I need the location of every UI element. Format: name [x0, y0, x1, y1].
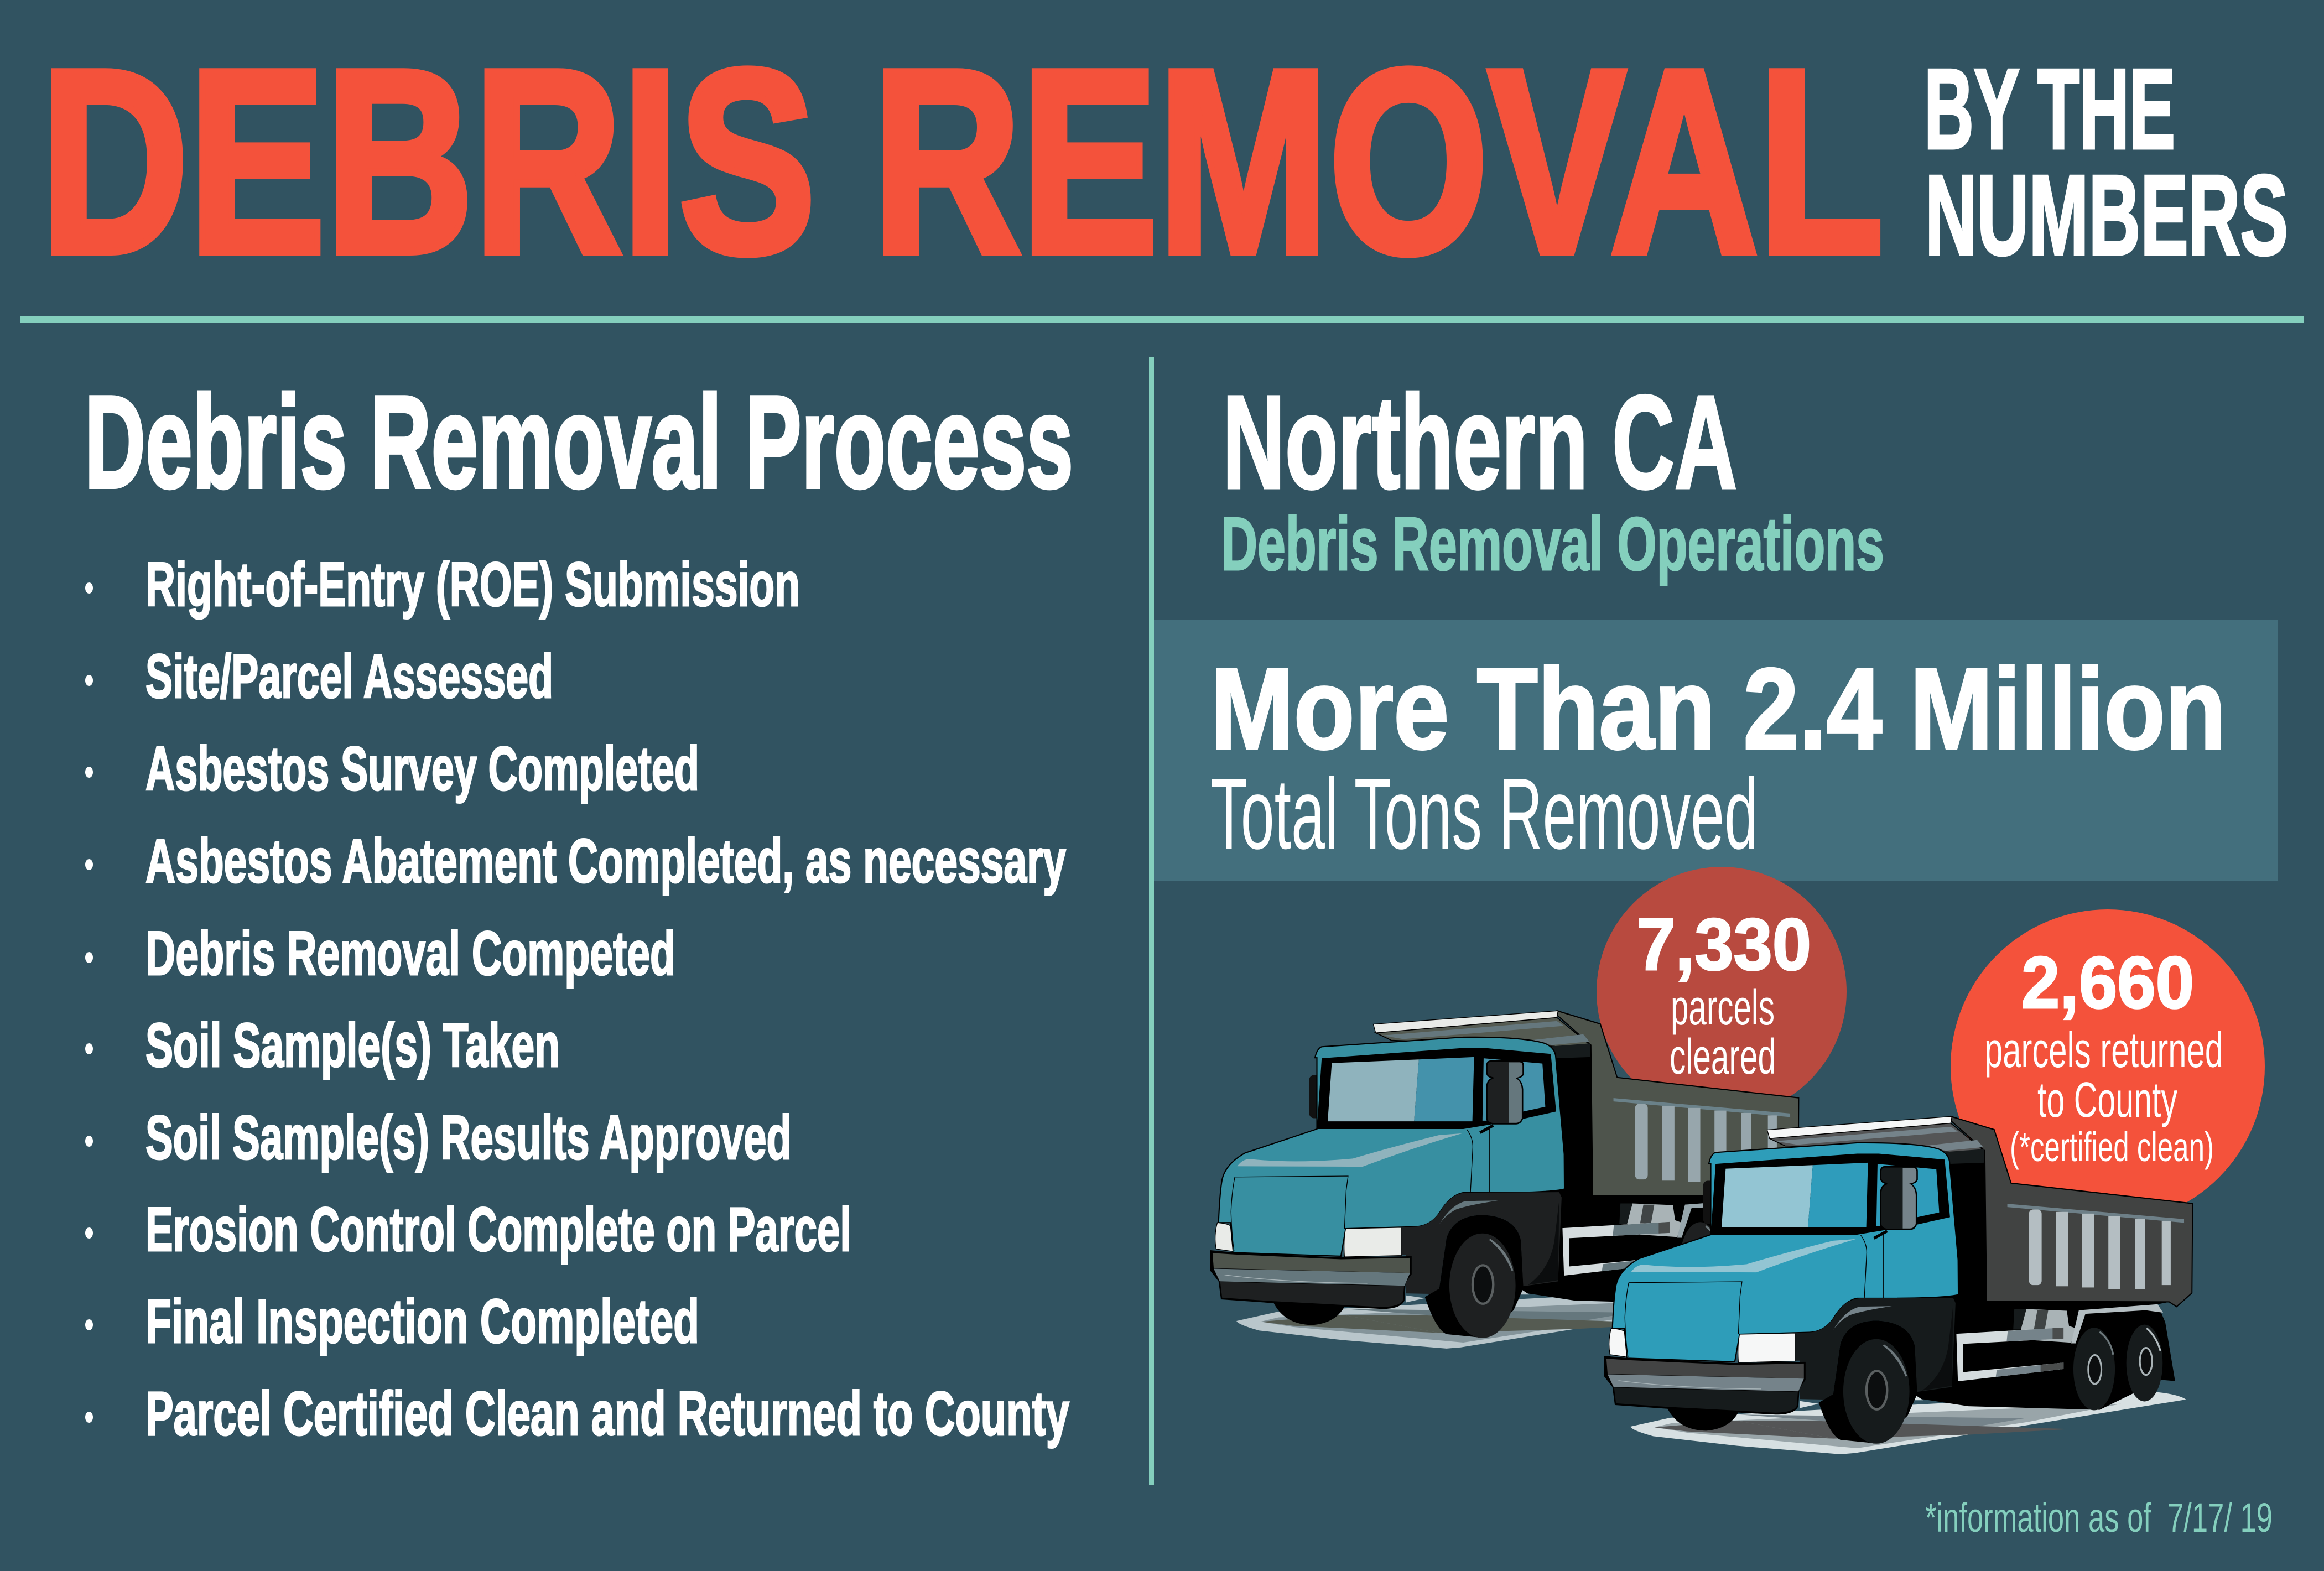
process step list: Final Inspection Completed: [145, 1287, 699, 1356]
process step list: Parcel Certified Clean and Returned to County: [145, 1379, 1069, 1448]
panel: total tons band: [1154, 620, 2278, 881]
process step list: Soil Sample(s) Taken: [145, 1011, 560, 1080]
process step list: Asbestos Survey Completed: [145, 734, 699, 803]
icon: dump truck, back: [1210, 1011, 1798, 1349]
callout: parcels cleared: cleared: [1670, 1029, 1776, 1085]
panel: debris removal process: [85, 369, 1073, 1448]
process step list: Erosion Control Complete on Parcel: [145, 1195, 851, 1264]
process step list: Debris Removal Competed: [145, 919, 675, 988]
callout: parcels cleared: parcels: [1671, 980, 1775, 1036]
process step list: Right-of-Entry (ROE) Submission: [145, 550, 800, 619]
process step list: Soil Sample(s) Results Approved: [145, 1103, 792, 1172]
callout: parcels returned: to County: [2037, 1073, 2177, 1128]
title: DEBRIS REMOVAL: [40, 16, 1884, 308]
callout: parcels returned: [1951, 909, 2265, 1224]
callout: parcels returned: (*certified clean): [2010, 1124, 2214, 1170]
subheading: operations: Debris Removal Operations: [1221, 502, 1884, 586]
heading: northern ca: Northern CA: [1223, 368, 1737, 516]
icon: dump truck, front: [1604, 1116, 2192, 1454]
process step list: Asbestos Abatement Completed, as necessary: [145, 826, 1066, 896]
heading: process: Debris Removal Process: [85, 369, 1073, 516]
process step list: [85, 550, 1069, 1448]
callout: parcels cleared: 7,330: [1636, 904, 1811, 986]
process step list: Site/Parcel Assessed: [145, 642, 553, 711]
panel: total tons band: Total Tons Removed: [1210, 757, 1758, 870]
callout: parcels returned: 2,660: [2021, 942, 2194, 1024]
callout: parcels cleared: [1597, 867, 1847, 1117]
subtitle: [1924, 45, 2288, 279]
